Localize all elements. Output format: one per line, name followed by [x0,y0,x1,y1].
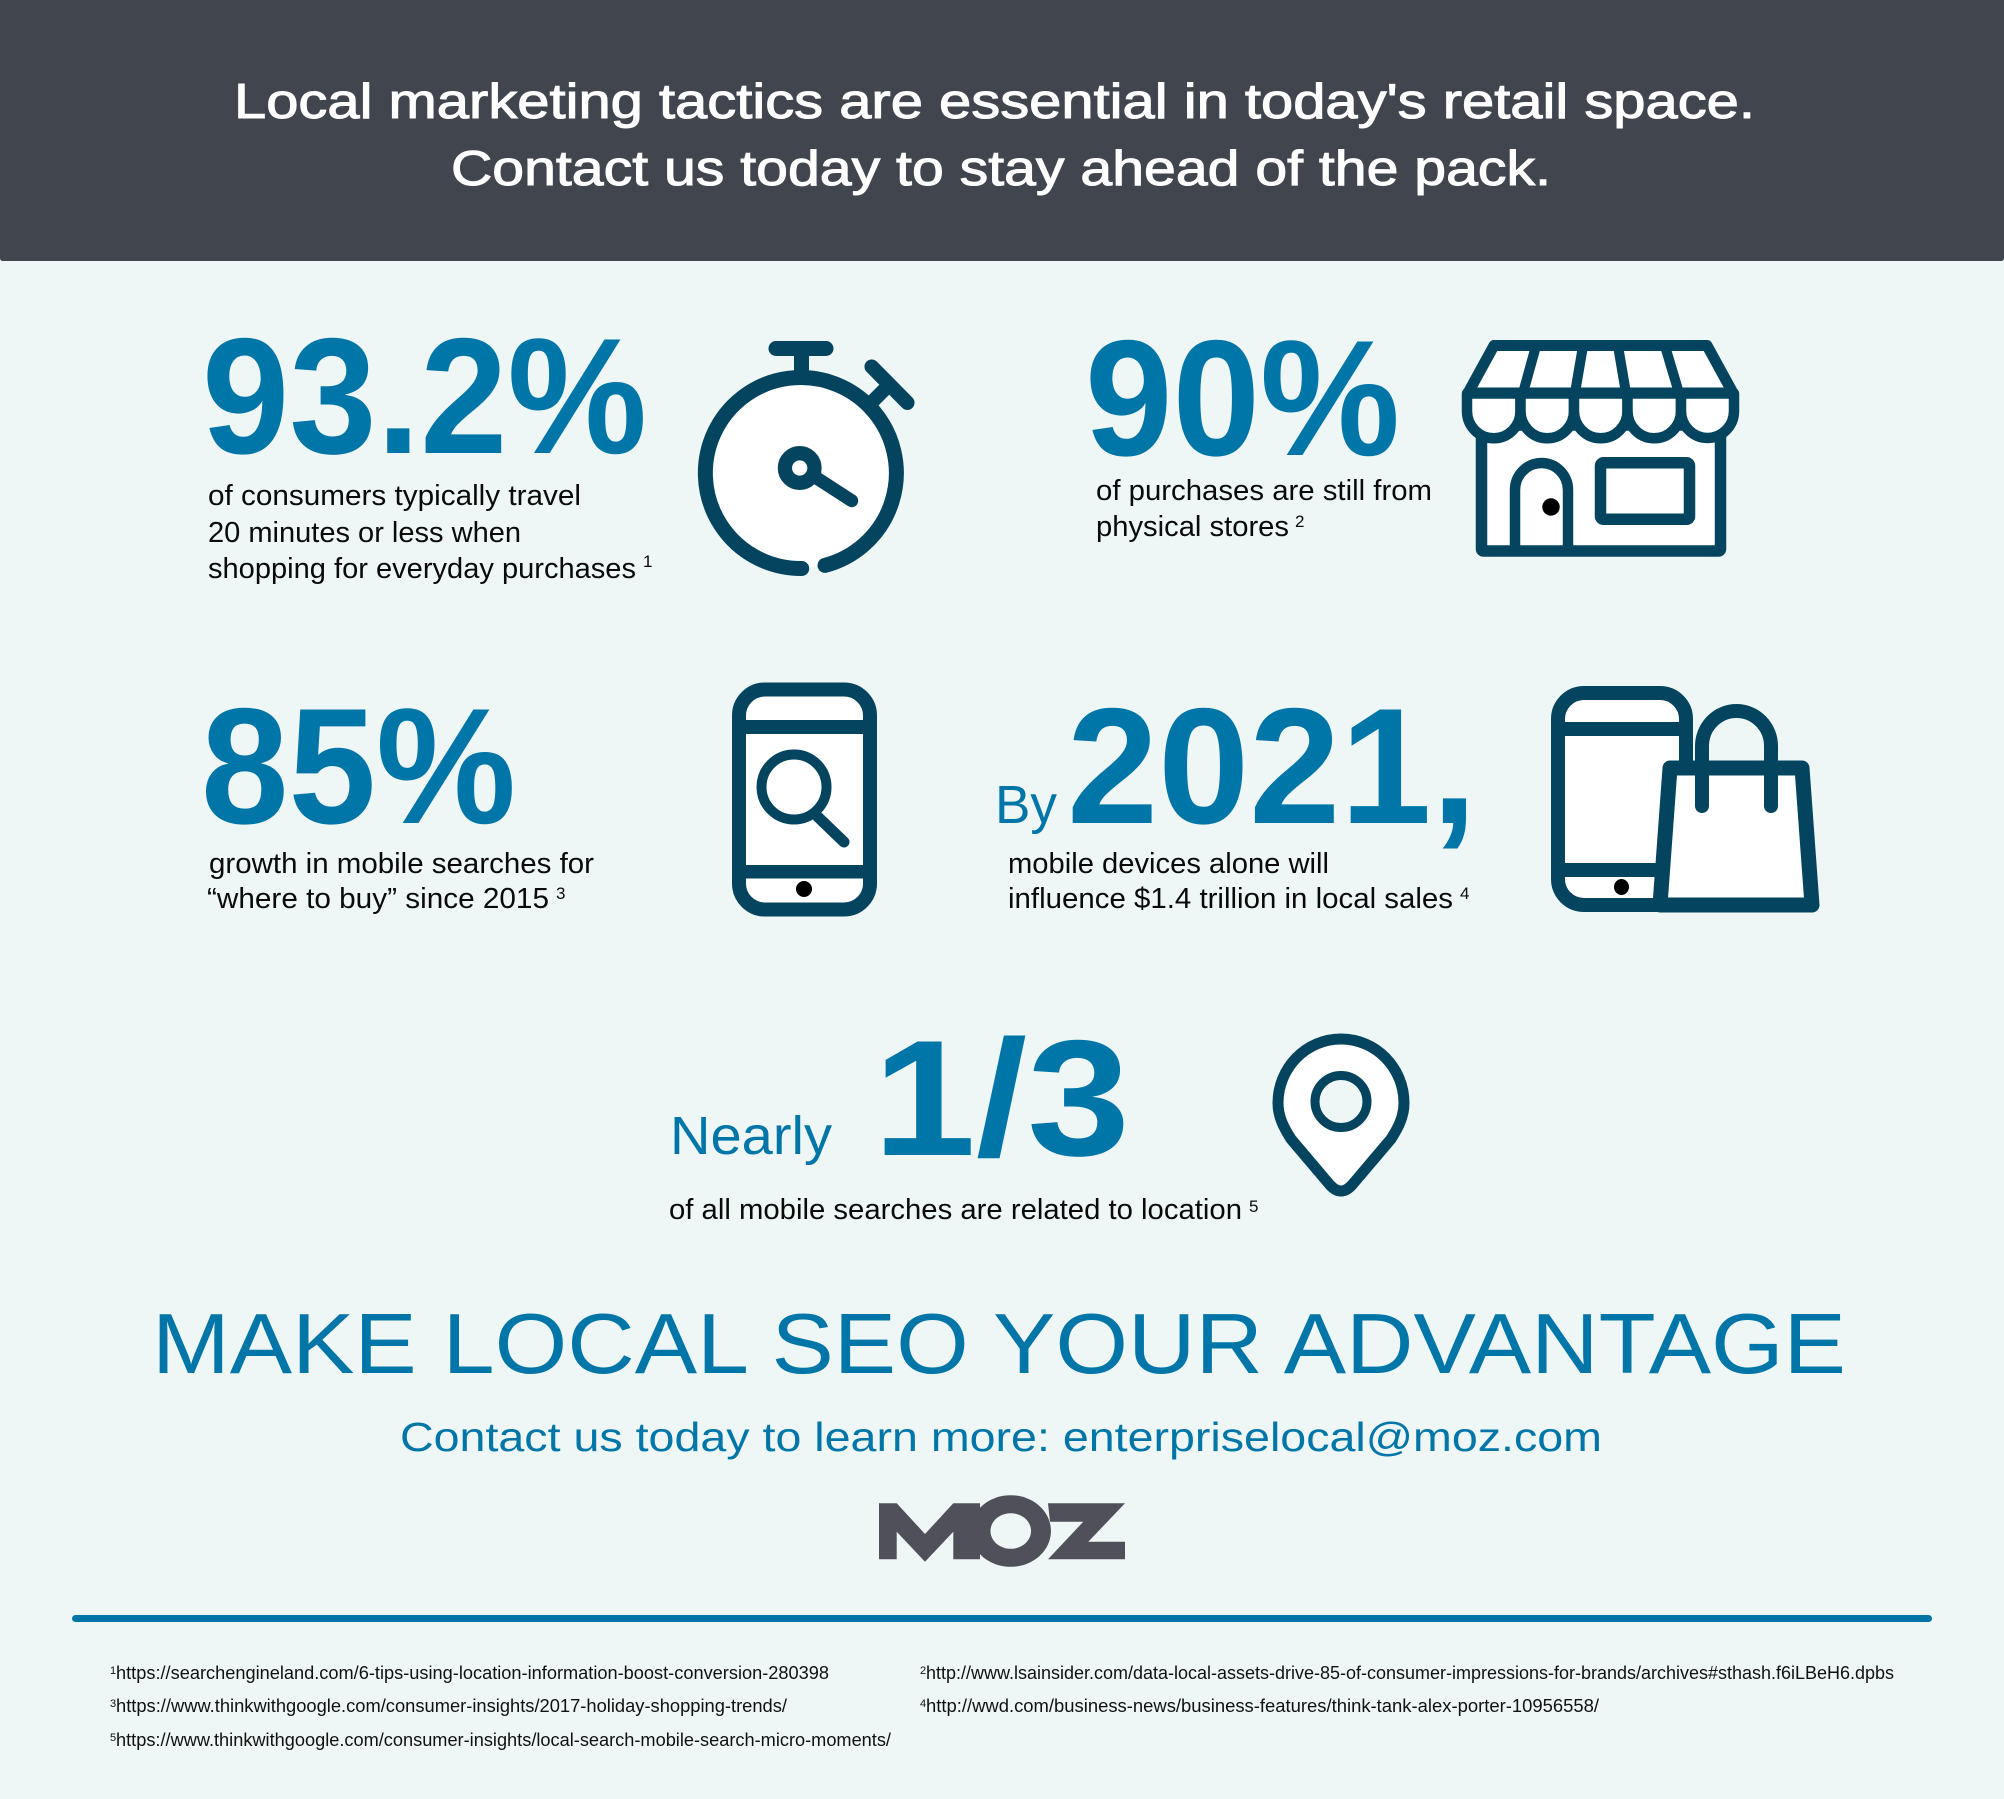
text block: mobile search growth: growth in mobile searches for [209,848,594,880]
text block: mobile search growth [207,848,594,915]
lead word: By: By [995,775,1057,835]
text block: travel stat: shopping for everyday purchases [208,553,636,585]
icon: map pin [1278,1039,1404,1191]
panel: stat nearly 1/3 [669,1006,1404,1226]
text block: contact line: Contact us today to learn more: enterpriselocal@moz.com [400,1414,1602,1460]
heading: header line 2: Contact us today to stay ahead of the pack. [451,142,1551,196]
footnote 4: http://wwd.com/business-news/business-features/think-tank-alex-porter-10956558/ [926,1696,1599,1716]
text block: location searches: of all mobile searches are related to location [669,1194,1242,1226]
panel: stat 85% [201,674,870,915]
text block: purchases stat [1096,475,1432,543]
logo: Moz [879,1495,1125,1567]
big number: 2021: 2021, [1067,674,1477,858]
heading: header line 1: Local marketing tactics are essential in today's retail space. [234,75,1755,129]
footnote 2: http://www.lsainsider.com/data-local-assets-drive-85-of-consumer-impressions-for-brands/archives#sthash.f6iLBeH6.dpbs [926,1663,1894,1683]
panel: stat 90% [1085,306,1734,551]
text block: purchases stat: of purchases are still from [1096,475,1432,507]
text block: purchases stat: physical stores [1096,511,1289,543]
icon: stopwatch [705,348,907,569]
panel: stat by 2021 [995,674,1812,915]
footnote 4: 4 [920,1698,926,1710]
big number: 85%: 85% [201,674,516,858]
footnote 1: https://searchengineland.com/6-tips-using-location-information-boost-conversion-280398 [116,1663,829,1683]
text block: travel stat: of consumers typically travel [208,480,581,512]
panel: stat 93.2% [202,304,907,585]
text block: mobile search growth: 3 [556,884,565,903]
text block: travel stat: 1 [643,552,652,571]
icon: phone and shopping bag [1558,693,1812,905]
footnote 2: 2 [920,1665,926,1677]
footnote 3: https://www.thinkwithgoogle.com/consumer-insights/2017-holiday-shopping-trends/ [116,1696,787,1716]
footnote 5: 5 [110,1732,116,1744]
big number: 90%: 90% [1085,306,1400,490]
icon: phone with magnifier [739,690,870,910]
panel: footnotes [110,1663,1894,1750]
text block: mobile influence: influence $1.4 trillion in local sales [1008,883,1453,915]
big number: 93.2%: 93.2% [202,304,647,488]
big number: 1/3: 1/3 [873,1006,1130,1190]
panel: header banner [0,0,2004,261]
divider rule [72,1615,1932,1622]
footnote 3: 3 [110,1698,116,1710]
footnote 1: 1 [110,1665,116,1677]
text block: purchases stat: 2 [1295,512,1304,531]
text block: mobile search growth: “where to buy” since 2015 [207,883,549,915]
text block: mobile influence: mobile devices alone will [1008,848,1329,880]
text block: travel stat [208,480,652,585]
text block: location searches: 5 [1249,1197,1258,1216]
icon: storefront [1467,346,1734,551]
heading: make local SEO your advantage: MAKE LOCAL SEO YOUR ADVANTAGE [152,1297,1846,1392]
text block: mobile influence: 4 [1460,884,1469,903]
footnote 5: https://www.thinkwithgoogle.com/consumer-insights/local-search-mobile-search-micro-moments/ [116,1730,891,1750]
text block: travel stat: 20 minutes or less when [208,517,521,549]
text block: mobile influence [1008,848,1469,915]
lead word: Nearly: Nearly [670,1106,832,1166]
